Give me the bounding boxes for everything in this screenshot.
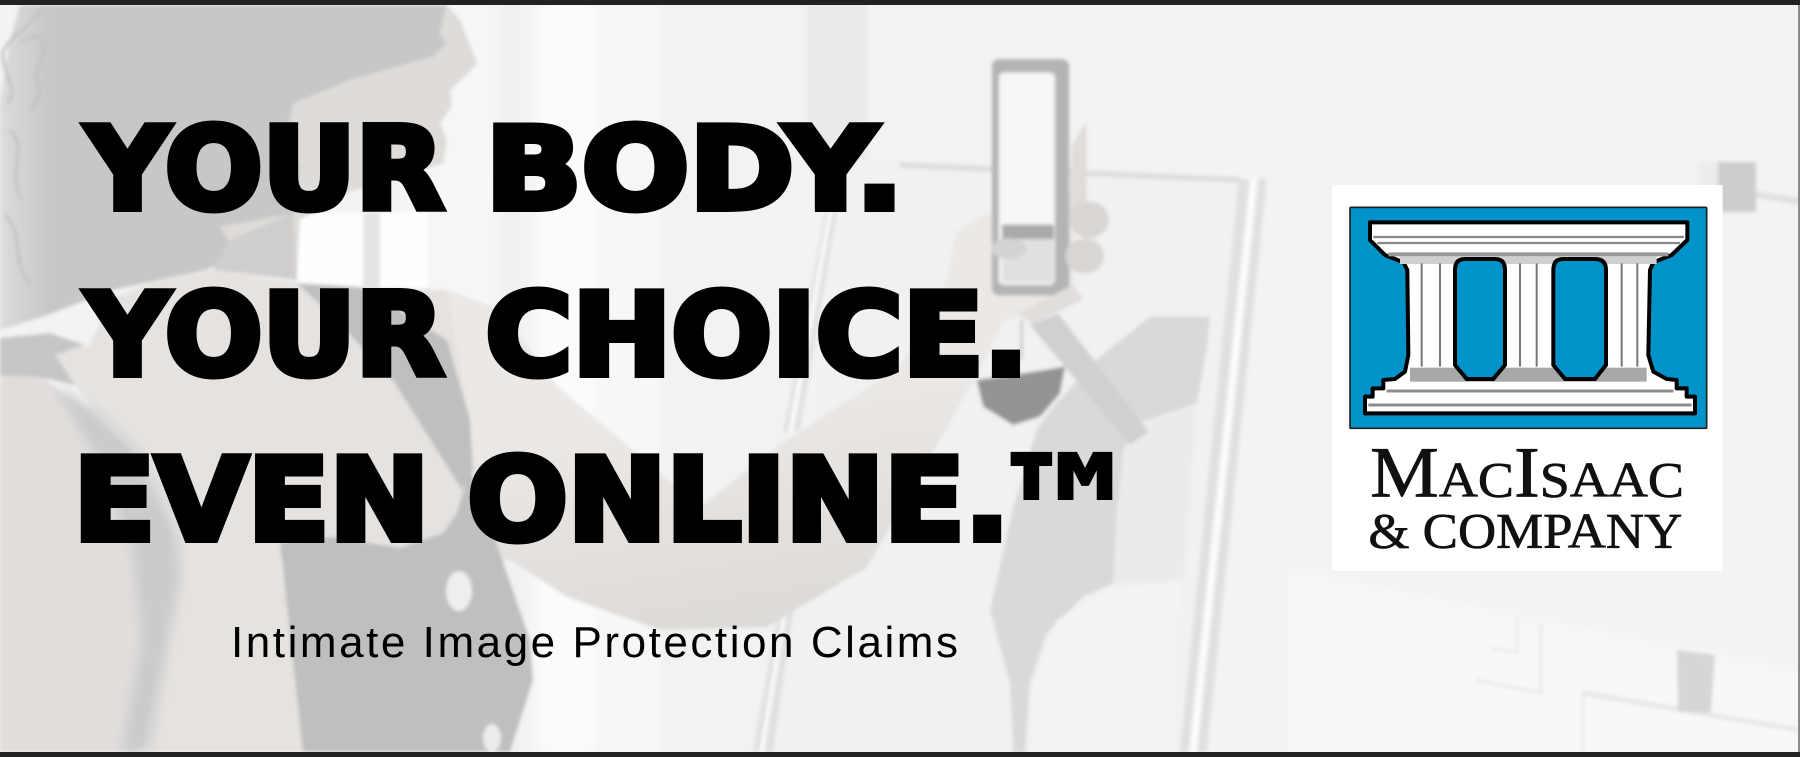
logo blue panel [1350, 207, 1707, 428]
trademark symbol: ™ [990, 421, 1143, 608]
face and neck [213, 5, 477, 280]
headline line 3 [74, 434, 1010, 566]
headline line 1: YOUR [84, 104, 444, 236]
phone and hand [992, 59, 1109, 324]
left arm [0, 375, 165, 752]
dress flowers [446, 571, 472, 611]
wall details on the right [1290, 162, 1800, 757]
window behind neck [297, 213, 427, 288]
headline line 3: ONLINE. [468, 434, 1010, 566]
headline [74, 104, 1143, 608]
right edge line [1798, 5, 1800, 752]
headline line 1 [84, 104, 904, 236]
mirror reflection of woman [990, 317, 1210, 753]
headline line 3: EVEN [74, 434, 429, 566]
subtitle: Intimate Image Protection Claims [231, 618, 958, 667]
hair [0, 5, 447, 330]
right strap [297, 283, 473, 490]
headline line 2: YOUR [84, 270, 444, 402]
logo wordmark line 1: MacIsaac [1370, 433, 1684, 513]
logo wordmark line 2: & COMPANY [1368, 503, 1682, 559]
upper body skin [52, 270, 560, 752]
headline line 2: CHOICE. [486, 270, 1028, 402]
icon: temple columns [1365, 222, 1695, 413]
headline line 1: BODY. [486, 104, 904, 236]
top bar [0, 0, 1800, 5]
back strap shadow [0, 333, 85, 385]
hair curls [3, 5, 45, 285]
arm reaching up [447, 215, 1075, 630]
mirror [753, 158, 1267, 752]
dress [280, 470, 533, 752]
bottom bar [0, 752, 1800, 757]
headline line 2 [84, 270, 1028, 402]
phone strap and charm [977, 313, 1148, 445]
logo: MacIsaac & Company [1332, 185, 1723, 571]
